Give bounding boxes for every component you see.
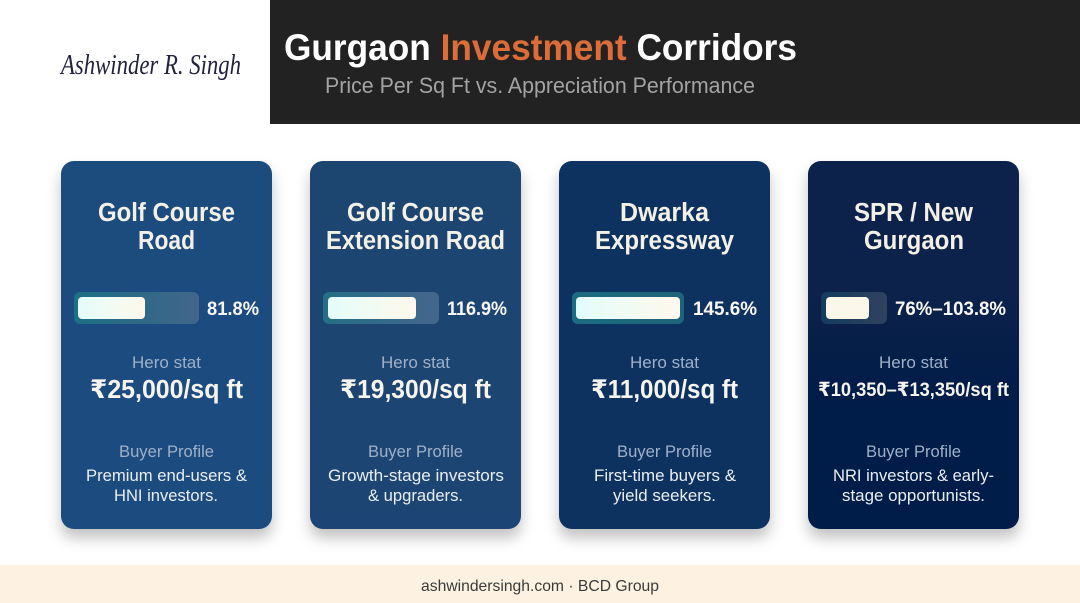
panel: Golf Course Extension Road [310,161,521,529]
buyer profile [833,443,994,505]
buyer profile: yield seekers. [613,487,716,505]
corridor name: Golf Course [98,199,235,227]
appreciation value: 145.6% [693,298,757,320]
hero stat value: ₹19,300/sq ft [340,376,491,404]
buyer profile: & upgraders. [368,487,463,505]
hero stat label: Hero stat [879,354,948,372]
buyer profile [328,443,504,505]
header banner [270,0,1080,124]
corridor name: Gurgaon [864,227,964,255]
corridor name [595,199,735,255]
corridor name: Extension Road [326,227,505,255]
corridor name: Golf Course [347,199,484,227]
buyer profile: stage opportunists. [842,487,985,505]
footer: ashwindersingh.com · BCD Group [421,578,659,595]
panel: SPR / New Gurgaon [808,161,1019,529]
buyer profile [594,443,736,505]
corridor name [98,199,235,255]
corridor name: SPR / New [854,199,973,227]
appreciation value: 76%–103.8% [895,298,1006,320]
buyer profile: Premium end-users & [86,467,247,485]
panel: Dwarka Expressway [559,161,770,529]
buyer profile: NRI investors & early- [833,467,994,485]
buyer profile: Buyer Profile [119,443,214,461]
appreciation value: 116.9% [447,298,507,320]
signature logo: Ashwinder R. Singh [59,50,241,81]
buyer profile: Buyer Profile [866,443,961,461]
buyer profile: Buyer Profile [368,443,463,461]
hero stat label: Hero stat [630,354,699,372]
buyer profile: HNI investors. [114,487,218,505]
hero stat label: Hero stat [381,354,450,372]
buyer profile: First-time buyers & [594,467,736,485]
appreciation value: 81.8% [207,298,259,320]
hero stat label: Hero stat [132,354,201,372]
hero stat value: ₹10,350–₹13,350/sq ft [818,379,1009,401]
appreciation bar [572,292,684,324]
corridor name [854,199,973,255]
buyer profile: Buyer Profile [617,443,712,461]
appreciation bar [74,292,199,324]
appreciation bar [323,292,439,324]
panel: Golf Course Road [61,161,272,529]
corridor name: Expressway [595,227,735,255]
buyer profile [86,443,247,505]
hero stat value: ₹11,000/sq ft [591,376,738,404]
corridor name: Road [138,227,195,255]
appreciation bar [821,292,887,324]
subtitle: Price Per Sq Ft vs. Appreciation Performance [325,73,755,98]
title: Gurgaon Investment Corridors [284,27,797,68]
corridor name: Dwarka [620,199,710,227]
hero stat value: ₹25,000/sq ft [90,376,243,404]
buyer profile: Growth-stage investors [328,467,504,485]
corridor name [326,199,505,255]
footer [0,565,1080,603]
